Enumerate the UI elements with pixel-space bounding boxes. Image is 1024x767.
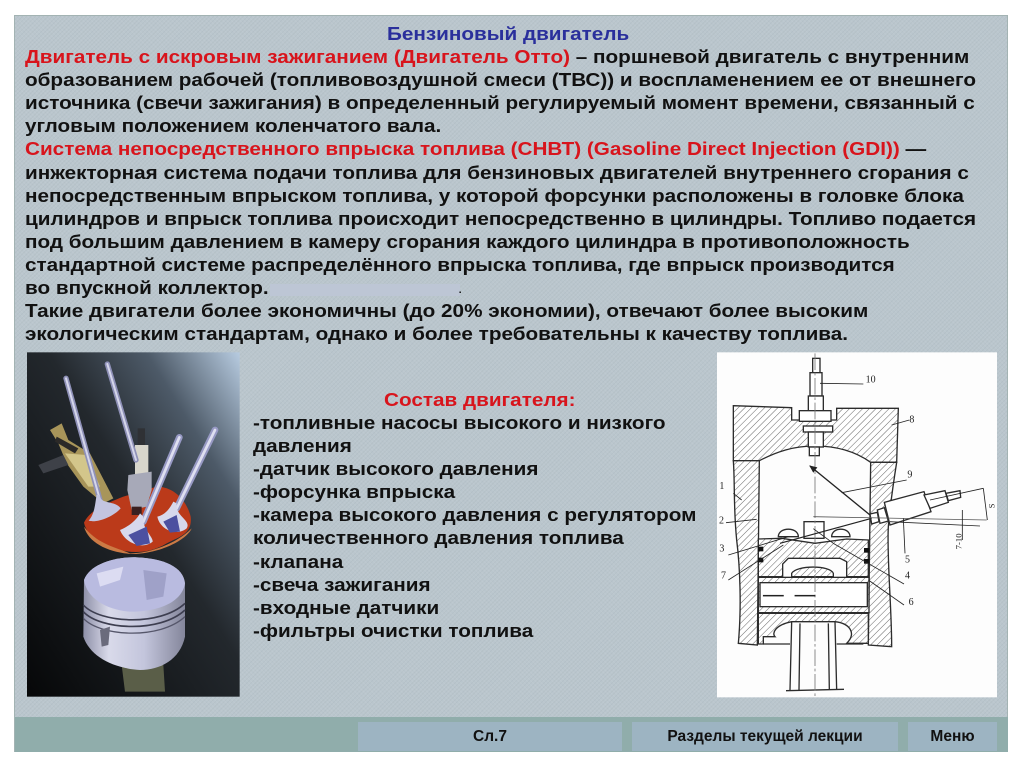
part number labels: 1: [719, 481, 724, 492]
part number labels: [719, 374, 997, 608]
list items: -входные датчики: [253, 597, 439, 618]
spray and leader lines: [726, 353, 987, 697]
piston pin: [758, 577, 869, 613]
piston crown bumps: [778, 529, 798, 537]
definition: direct fuel injection: инжекторная система подачи топлива для бензиновых двигателей внутреннего сгорания с: [25, 162, 969, 183]
list items: количественного давления топлива: [253, 527, 624, 548]
definition: direct fuel injection: .: [458, 280, 462, 296]
piston rod: [122, 665, 165, 692]
cylinder walls: [733, 461, 759, 645]
part number labels: 7: [721, 570, 726, 581]
button: slide number: Сл.7: [473, 728, 507, 745]
intake and exhaust valves: [66, 364, 215, 546]
definition: direct fuel injection: непосредственным впрыском топлива, у которой форсунки расположены в головке блока: [25, 185, 964, 206]
button: menu: Меню: [930, 728, 975, 745]
part number labels: 4: [905, 571, 910, 582]
cylinder head: [733, 406, 898, 462]
definition: direct fuel injection: [25, 138, 976, 298]
piston body: [758, 538, 868, 577]
part number labels: S: [987, 503, 997, 508]
definition: direct fuel injection: во впускной коллектор.: [25, 277, 269, 298]
heading: gasoline engine: Бензиновый двигатель: [387, 23, 629, 44]
list items: -камера высокого давления с регулятором: [253, 504, 696, 525]
list items: -фильтры очистки топлива: [253, 620, 533, 641]
part number labels: 10: [866, 374, 876, 385]
list items: -свеча зажигания: [253, 574, 431, 595]
part number labels: 6: [909, 597, 914, 608]
part number labels: 3: [719, 544, 724, 555]
definition: Otto engine: Двигатель с искровым зажиганием (Двигатель Отто) – поршневой двигатель с внутренним: [25, 46, 969, 67]
list items: -топливные насосы высокого и низкого: [253, 412, 666, 433]
text block: engine definitions: [25, 46, 976, 344]
definition: Otto engine: [25, 46, 976, 136]
list items: давления: [253, 435, 352, 456]
button: lecture sections: [632, 722, 898, 751]
definition: Otto engine: образованием рабочей (топливовоздушной смеси (ТВС)) и воспламенением ее от внешнего: [25, 69, 976, 90]
connecting rod: [790, 622, 837, 690]
list items: -датчик высокого давления: [253, 458, 538, 479]
definition: advantages: экологическим стандартам, однако и более требовательны к качеству топлива.: [25, 323, 848, 344]
footer band: [15, 717, 1008, 752]
button: menu: [908, 722, 997, 751]
piston rings: [758, 547, 869, 564]
definition: direct fuel injection: стандартной системе распределённого впрыска топлива, где впрыск производится: [25, 254, 895, 275]
definition: advantages: [25, 300, 868, 344]
list heading: Состав двигателя:: [384, 389, 575, 410]
button: lecture sections: Разделы текущей лекции: [667, 728, 863, 745]
definition: direct fuel injection: Система непосредственного впрыска топлива (СНВТ) (Gasoline Direct Injection (GDI)) —: [25, 138, 926, 159]
image: valves and piston photo: [27, 352, 240, 697]
definition: direct fuel injection: цилиндров и впрыск топлива происходит непосредственно в цилиндры. Топливо подается: [25, 208, 976, 229]
valve plate: [84, 487, 191, 552]
part number labels: 8: [909, 414, 914, 425]
list items: -форсунка впрыска: [253, 481, 455, 502]
part number labels: 9: [907, 469, 912, 480]
piston: [83, 557, 185, 670]
part number labels: 7-10: [953, 533, 963, 549]
definition: Otto engine: источника (свечи зажигания) в определенный регулируемый момент времени, связанный с: [25, 92, 975, 113]
part number labels: 5: [905, 555, 910, 566]
button: slide number: [358, 722, 622, 751]
injector: [870, 491, 961, 525]
spark plug: [799, 358, 833, 456]
spark plug: [127, 428, 152, 515]
fuel injector: [38, 423, 113, 503]
list items: -клапана: [253, 551, 343, 572]
definition: Otto engine: угловым положением коленчатого вала.: [25, 115, 441, 136]
list items: [253, 412, 696, 641]
diagram: engine cylinder cross-section: [717, 352, 997, 698]
part number labels: 2: [719, 515, 724, 526]
definition: advantages: Такие двигатели более экономичны (до 20% экономии), отвечают более высоким: [25, 300, 868, 321]
text block: engine composition list: [253, 389, 696, 641]
definition: direct fuel injection: под большим давлением в камеру сгорания каждого цилиндра в противоположность: [25, 231, 910, 252]
